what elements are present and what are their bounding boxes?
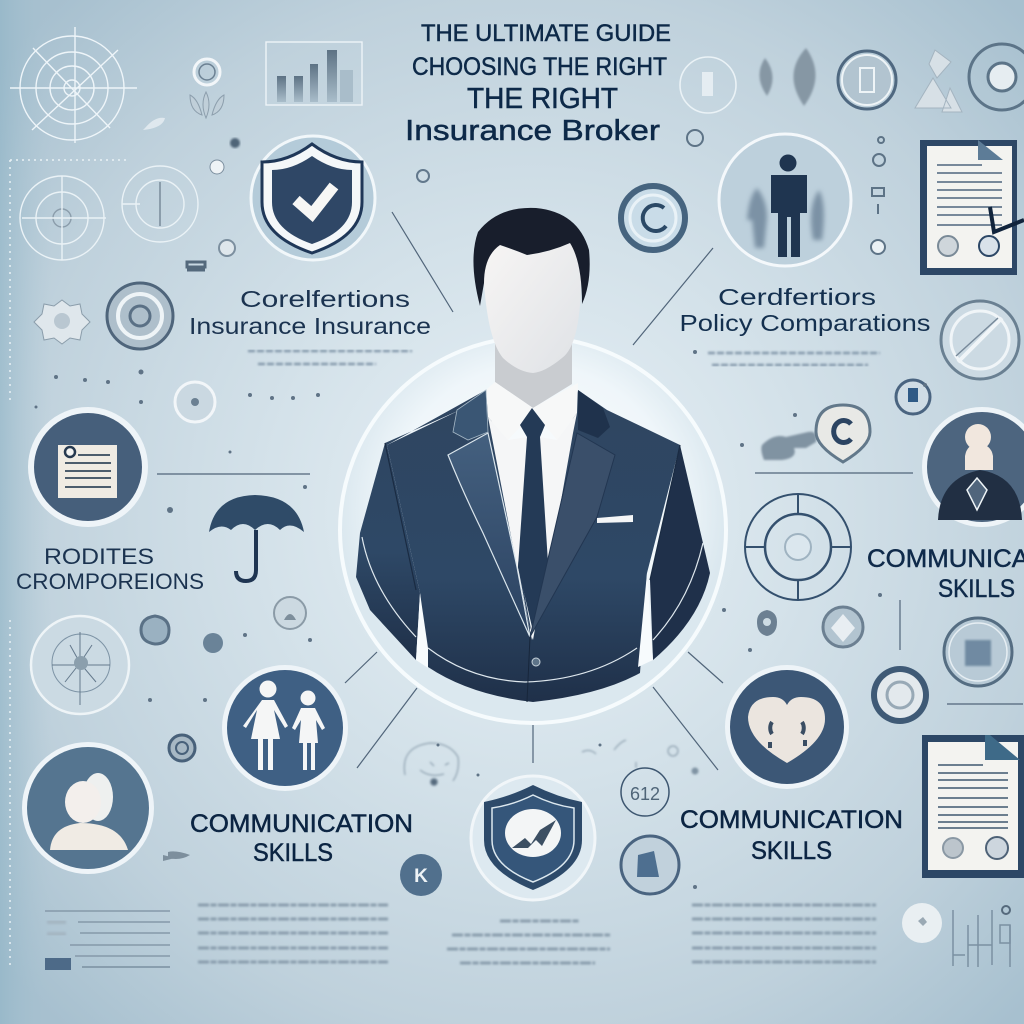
small icons upper right bbox=[687, 130, 885, 254]
heading: certifications left: Corelfertions bbox=[240, 286, 410, 312]
title: Insurance Broker bbox=[405, 115, 660, 147]
figure: neck bbox=[495, 340, 572, 408]
scattered dots bbox=[34, 350, 927, 889]
heading: policies comparisons: RODITES bbox=[44, 544, 154, 569]
title: THE ULTIMATE GUIDE bbox=[421, 20, 671, 47]
icon: small bottom badges bbox=[400, 666, 929, 896]
figure: collar bbox=[486, 382, 578, 440]
heading: communication skills left: SKILLS bbox=[253, 839, 333, 867]
text lines under headings bbox=[248, 351, 880, 365]
icon: small badges bbox=[141, 170, 930, 861]
icon: top-right circles bbox=[680, 44, 1024, 113]
panel: person icon bbox=[719, 134, 851, 266]
heading: policy comparisons bbox=[680, 284, 930, 336]
heading: policies comparisons: CROMPOREIONS bbox=[16, 569, 204, 594]
icon: C circle bbox=[621, 186, 685, 250]
icon: bar chart bbox=[266, 42, 362, 105]
figure: hair bbox=[473, 208, 590, 306]
central figure bbox=[340, 208, 726, 723]
panel: family icon bbox=[222, 665, 348, 791]
icon: no-sign right bbox=[941, 301, 1019, 379]
title: CHOOSING THE RIGHT bbox=[412, 53, 667, 81]
title: THE RIGHT bbox=[467, 83, 618, 115]
icon: document top right bbox=[920, 140, 1024, 275]
icon: left target badge bbox=[34, 283, 173, 349]
panel: shield icon bbox=[251, 136, 375, 260]
heading: communication skills left: COMMUNICATION bbox=[190, 810, 413, 838]
icon: right lower ring bbox=[944, 618, 1012, 686]
heading: certifications left: Insurance Insurance bbox=[189, 313, 431, 339]
heading: communication skills left bbox=[190, 810, 413, 867]
radar icons left bbox=[20, 166, 198, 260]
bottom text blocks bbox=[198, 905, 876, 963]
icon: emblem with leaves bbox=[143, 59, 240, 270]
heading: communication skills center right bbox=[680, 806, 903, 865]
figure: pocket square bbox=[597, 515, 633, 523]
decorative top-left radar icon bbox=[10, 27, 137, 143]
panel: heart icon bbox=[725, 665, 849, 789]
icon: small bottom badges: 612 bbox=[630, 784, 660, 804]
icon: document circle bbox=[28, 407, 148, 527]
icon: target right bbox=[745, 494, 851, 600]
heading: policy comparisons: Cerdfertiors bbox=[718, 284, 876, 310]
icon: sun circle left bbox=[31, 616, 129, 714]
heading: communication skills right bbox=[867, 545, 1024, 603]
icon: person circle right bbox=[922, 407, 1024, 527]
heading: communication skills right: SKILLS bbox=[938, 575, 1015, 603]
heading: communication skills right: COMMUNICA bbox=[867, 545, 1024, 573]
heading: policies comparisons bbox=[16, 544, 204, 594]
title bbox=[405, 20, 671, 147]
figure: lapels bbox=[453, 390, 488, 440]
icon: small bottom badges: K bbox=[414, 866, 428, 887]
panel: bottom shield bbox=[471, 776, 595, 900]
icon: bottom right bulb and bars bbox=[902, 903, 1010, 967]
panel: people icon bbox=[22, 742, 154, 874]
icon: umbrella bbox=[209, 495, 304, 581]
heading: communication skills center right: SKILLS bbox=[751, 837, 832, 865]
heading: communication skills center right: COMMUNICATION bbox=[680, 806, 903, 834]
bottom left list bbox=[45, 902, 170, 970]
doodle face bbox=[404, 740, 698, 786]
figure: shirt bbox=[488, 413, 577, 640]
figure: jacket bbox=[356, 390, 710, 702]
heading: certifications left bbox=[189, 286, 431, 339]
figure: head bbox=[484, 243, 581, 373]
heading: policy comparisons: Policy Comparations bbox=[680, 310, 930, 336]
icon: document bottom right bbox=[922, 735, 1024, 878]
figure: tie bbox=[518, 408, 548, 627]
connector lines bbox=[157, 212, 1023, 770]
